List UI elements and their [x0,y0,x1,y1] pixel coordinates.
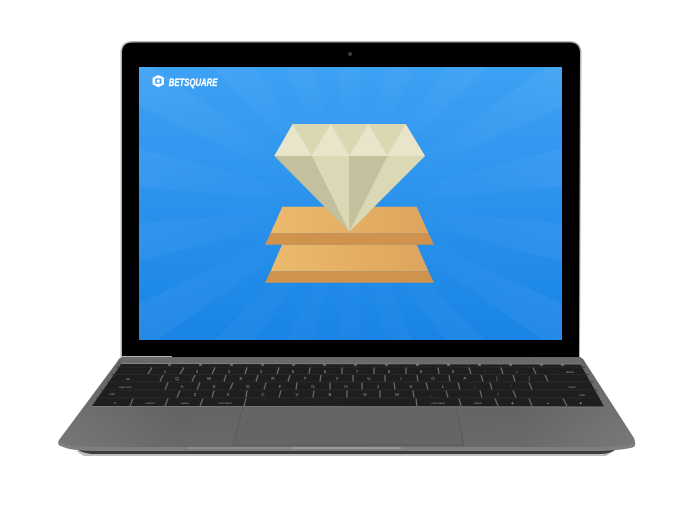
key legends: [ [496,376,498,381]
display lid [120,41,582,357]
key legends: 2 [196,369,199,374]
key row dividers [96,367,600,398]
key legends: Q [175,376,179,381]
key legends: 4 [260,369,263,374]
black bezel [122,42,580,357]
key legends: tab [126,377,130,381]
logo mark [153,75,164,87]
key legends: D [246,384,250,389]
key legends: E [239,376,243,381]
key legends: shift [579,393,585,397]
key legends: M [395,392,399,397]
gold bars [265,207,434,283]
key legends: W [207,376,212,381]
keyboard [91,363,605,408]
key legends: caps lock [119,385,132,389]
key legends: A [180,384,184,389]
key legends: G [311,384,315,389]
key legends: ; [474,384,476,389]
key legends: command [431,401,445,405]
silver frame [120,41,582,357]
key legends: T [304,376,307,381]
key legends: option [474,401,482,405]
function row markers [168,364,564,366]
key legends: O [431,376,435,381]
front edge [58,442,635,451]
key legends: B [328,392,332,397]
keyboard well [92,363,604,406]
key legends [109,369,585,405]
pavilion facets [274,156,387,232]
screen [139,67,562,340]
key legends: 8 [388,369,391,374]
key legends: 3 [228,369,231,374]
upper bar [265,207,434,245]
key legends: ▶ [580,401,583,405]
key legends: C [261,392,265,397]
key legends: = [516,369,519,374]
crown [274,124,425,156]
key legends: 6 [324,369,327,374]
deck surface [58,357,635,448]
key legends: N [363,392,367,397]
laptop base [58,356,635,454]
sunburst rays [139,67,562,340]
screen background [139,67,562,340]
crown facets [274,124,425,156]
key legends: 9 [420,369,423,374]
key legends: S [212,384,216,389]
key legends: shift [109,392,115,396]
key legends: F [279,384,282,389]
ground shadow [76,451,614,456]
key legends: ] [528,376,530,381]
logo [153,75,218,89]
key legends: X [226,392,230,397]
key legends: / [497,392,499,397]
hinge strip [120,356,582,363]
camera [348,52,352,56]
key legends: - [484,369,486,374]
key legends: P [463,376,467,381]
key legends: I [400,376,402,381]
key legends: command [218,401,232,405]
key legends: 7 [356,369,359,374]
key legends: R [271,376,275,381]
lower bar [265,245,434,283]
key legends: U [367,376,371,381]
key legends: delete [566,370,574,374]
front notch highlight [188,447,293,449]
diamond [274,124,425,232]
key legends: L [442,384,445,389]
logo wordmark: BETSQUARE [169,77,218,89]
key legends: , [430,392,432,397]
key legends: Z [194,392,197,397]
key legends: V [295,392,299,397]
key legends: J [377,384,379,389]
key legends: return [568,385,576,389]
front underside [76,449,617,454]
key legends: 0 [452,369,455,374]
key legends: Y [335,376,339,381]
key legends: H [344,384,348,389]
key legends: ◀ [511,401,514,405]
key legends: 1 [164,369,167,374]
key separators [130,368,567,406]
trackpad [233,407,464,445]
key legends: ▲ [547,401,550,405]
key legends: control [145,401,155,405]
key legends: . [463,392,465,397]
key legends: 5 [292,369,295,374]
key legends: ' [511,384,512,389]
key legends: fn [114,401,117,405]
key legends: K [409,384,413,389]
key legends: option [181,401,189,405]
